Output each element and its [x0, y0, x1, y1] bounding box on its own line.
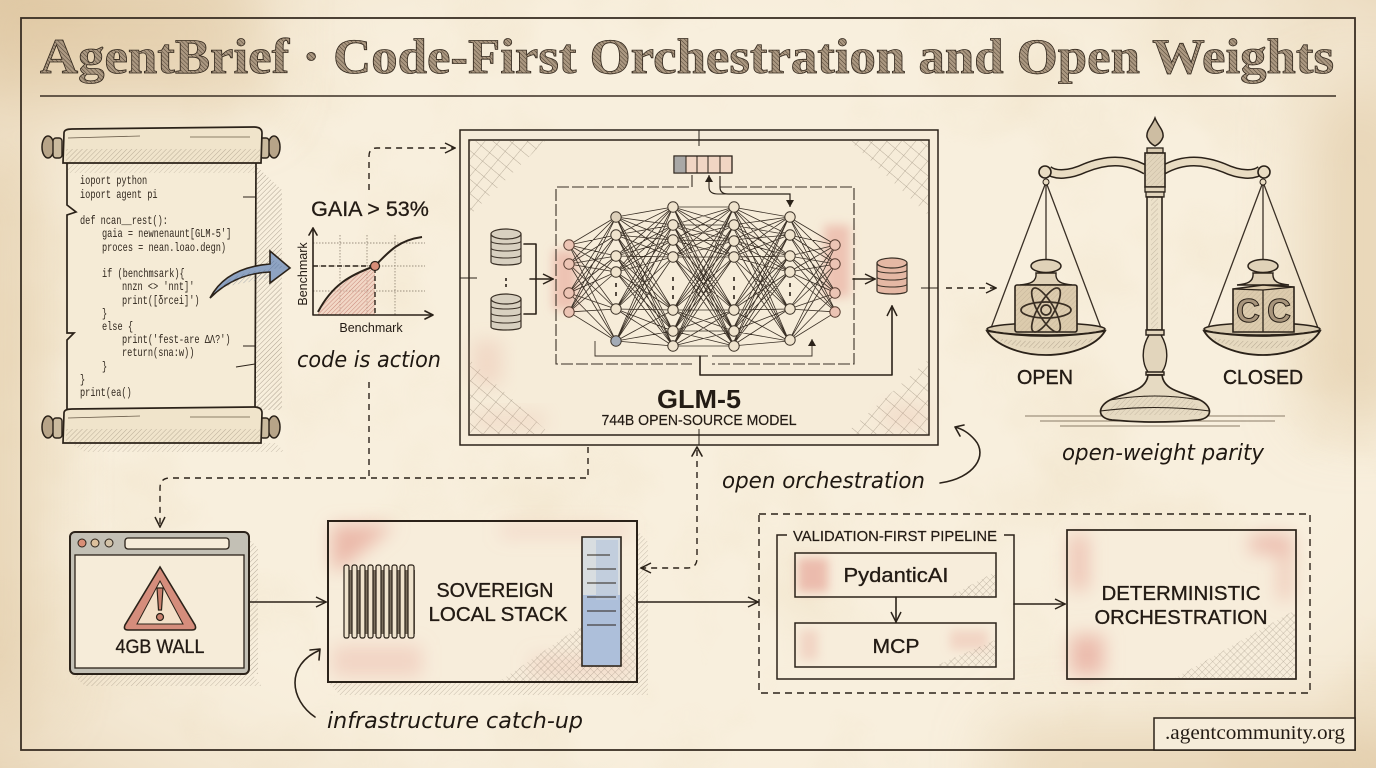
neural network — [564, 202, 840, 351]
scale beam — [1039, 162, 1270, 185]
code listing: gaia = newnenaunt[GLM-5'] — [102, 228, 231, 242]
benchmark chart: Benchmark — [339, 321, 403, 335]
dashed double arrow: GLM-5 to stack — [641, 447, 702, 568]
PydanticAI box: PydanticAI — [844, 565, 948, 587]
register block — [674, 156, 732, 173]
footer source tag — [1154, 718, 1355, 750]
arrow: stack to pipeline — [638, 601, 758, 603]
label: 4GB wall: 4GB WALL — [116, 637, 204, 658]
caption: open orchestration: open orchestration — [722, 469, 925, 494]
input databases — [491, 229, 553, 330]
balance scale — [987, 118, 1320, 426]
code listing: print('fest-are ΔΛ?') — [122, 334, 231, 348]
stack title: SOVEREIGN — [436, 580, 554, 602]
dashed arrow: chart to GLM-5 — [369, 148, 455, 190]
title: AgentBrief · Code-First Orchestration and Open Weights — [40, 28, 1334, 84]
letters C C: C — [1267, 292, 1291, 329]
arrow: code to chart — [210, 251, 290, 298]
left pan — [987, 331, 1105, 355]
caption: code is action: code is action — [297, 348, 441, 373]
panel: 4GB wall window — [70, 532, 262, 686]
code listing: nnzn <> 'nnt]' — [122, 281, 194, 295]
code listing: proces = nean.loao.degn) — [102, 242, 226, 256]
stack title — [428, 580, 568, 626]
validation-first box: VALIDATION-FIRST PIPELINE — [793, 529, 997, 545]
caption: infrastructure catch-up: infrastructure catch-up — [327, 709, 583, 734]
code listing: def ncan__rest(): — [80, 215, 168, 229]
network pink washes — [553, 225, 850, 310]
letters C C: C — [1236, 292, 1260, 329]
icon: atom network — [1021, 284, 1071, 336]
code listing: print([δrcei]') — [122, 295, 200, 309]
benchmark chart — [296, 197, 433, 335]
icon: server rack — [582, 537, 621, 666]
deterministic orchestration box: DETERMINISTIC — [1102, 582, 1261, 605]
panel: dashed pipeline container — [759, 514, 1310, 693]
icon: radiator — [344, 565, 415, 638]
label: closed: CLOSED — [1223, 367, 1303, 389]
benchmark chart: GAIA > 53% — [311, 197, 429, 221]
panel: GLM-5 model — [460, 130, 938, 445]
caption: open-weight parity: open-weight parity — [1062, 441, 1265, 466]
code listing: } — [102, 308, 107, 322]
MCP box: MCP — [872, 636, 920, 658]
output database — [700, 258, 907, 375]
arrow: wall to stack — [250, 601, 326, 603]
weight: open — [1015, 260, 1077, 336]
code listing: } — [80, 374, 85, 388]
dashed network frame — [556, 175, 854, 364]
label: open: OPEN — [1017, 367, 1073, 389]
model subtitle: 744B OPEN-SOURCE MODEL — [602, 412, 796, 429]
code listing: return(sna:w)) — [122, 347, 194, 361]
dashed arrow: GLM-5 to scale — [946, 287, 996, 289]
PydanticAI box — [795, 553, 996, 597]
panel: sovereign local stack — [328, 521, 648, 695]
icon: warning triangle — [124, 567, 196, 630]
deterministic orchestration box: ORCHESTRATION — [1094, 606, 1268, 629]
scale ropes and pan rims — [987, 182, 1320, 335]
dashed arrow: to 4GB wall — [160, 382, 588, 527]
arrow: PydanticAI to MCP — [895, 597, 897, 622]
MCP box — [795, 623, 996, 667]
deterministic orchestration box — [1067, 530, 1296, 679]
code listing: if (benchmsark){ — [102, 268, 185, 282]
code listing: ioport python — [80, 175, 147, 189]
model name: GLM-5 — [657, 386, 741, 414]
footer source tag: .agentcommunity.org — [1165, 722, 1345, 744]
scroll with code — [42, 127, 285, 452]
code listing: else { — [102, 321, 133, 335]
curved arrow: infrastructure — [295, 649, 320, 717]
right pan — [1204, 331, 1320, 355]
code listing — [80, 175, 231, 401]
stack title: LOCAL STACK — [428, 604, 568, 626]
arrow: pipeline to orchestration — [1014, 603, 1065, 605]
code listing: ioport agent pi — [80, 189, 158, 203]
validation-first box — [777, 529, 1014, 679]
code listing: } — [102, 361, 107, 375]
code listing: print(ea() — [80, 387, 132, 401]
curved arrow: to GLM-5 — [940, 425, 980, 483]
letters C C — [1236, 292, 1291, 329]
scale post — [1100, 118, 1210, 422]
weight: closed — [1233, 260, 1294, 332]
benchmark chart: Benchmark — [296, 242, 310, 306]
